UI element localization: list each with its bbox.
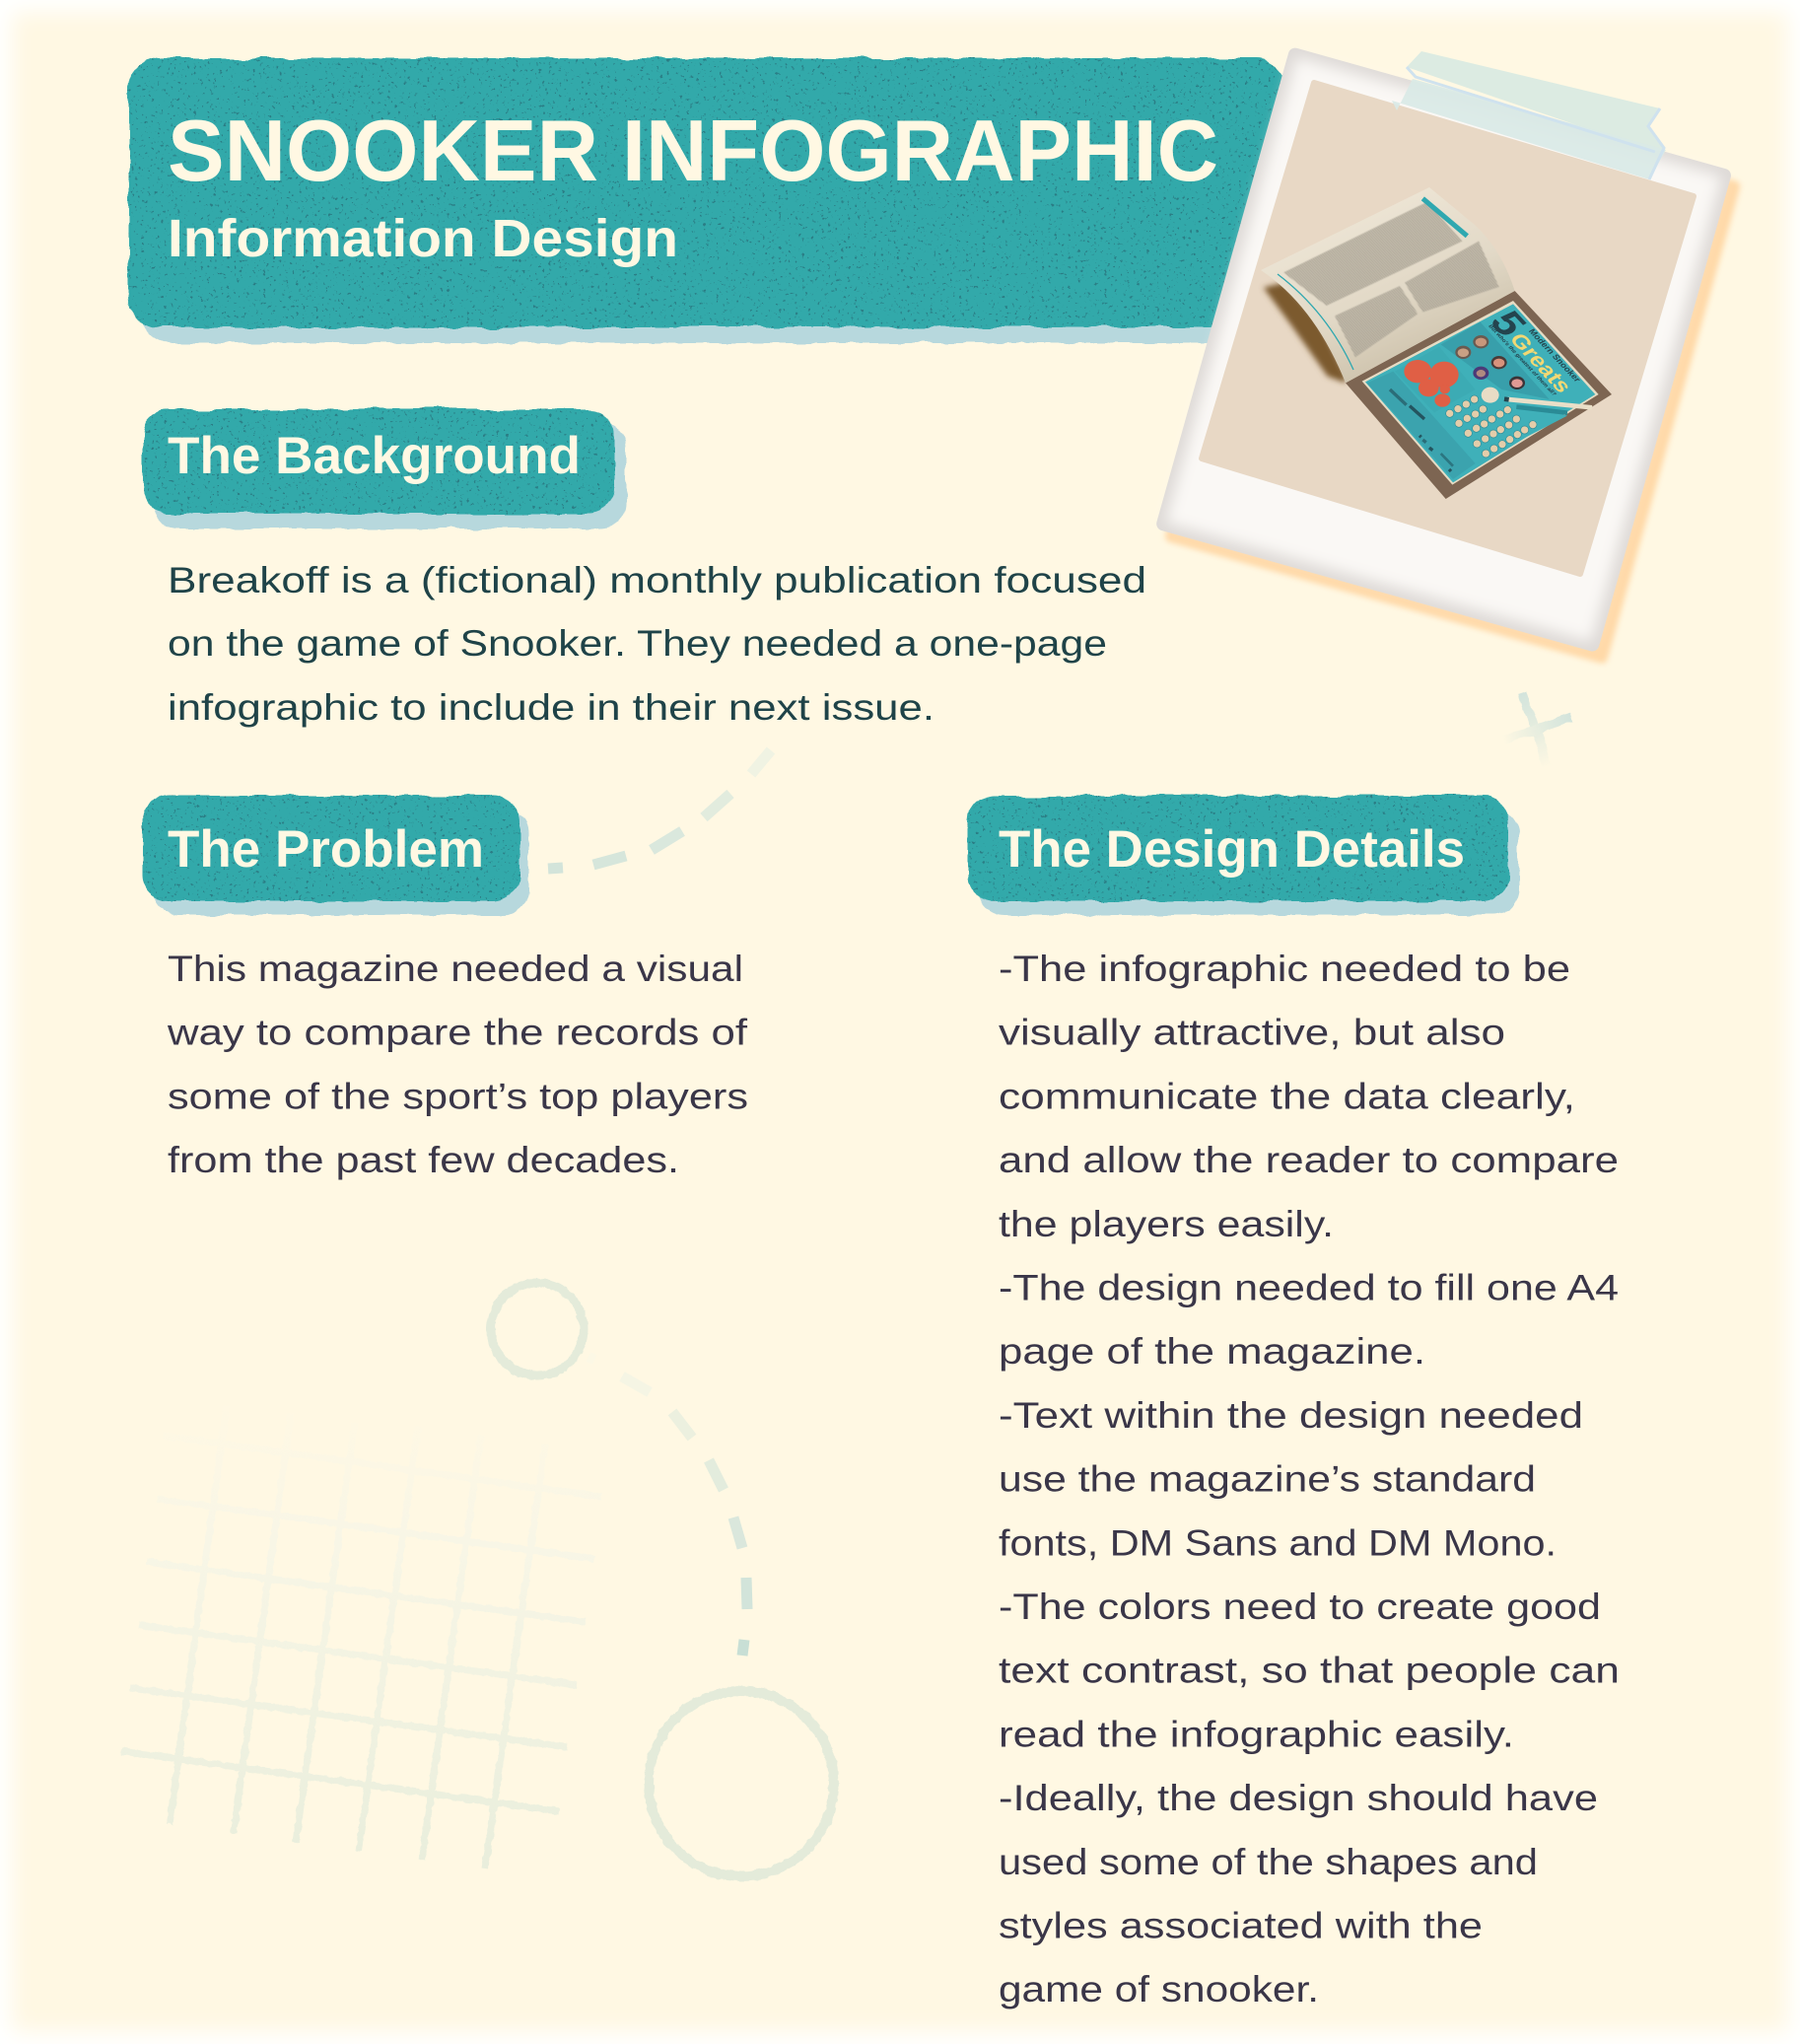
magazine title text: Modern Snooker <box>1527 327 1583 384</box>
text: problem body: This magazine needed a visual <box>168 949 743 989</box>
text: design details body: and allow the reader to compare <box>999 1140 1619 1180</box>
magazine title text: Greats <box>1504 329 1577 396</box>
text: design details body: page of the magazine. <box>999 1331 1425 1372</box>
text: design details body: used some of the shapes and <box>999 1842 1538 1882</box>
magazine mockup <box>1261 187 1612 499</box>
text: design details body: -The design needed to fill one A4 <box>999 1268 1619 1307</box>
heading: The Problem <box>143 796 527 915</box>
section: The Design Details <box>968 796 1620 2009</box>
magazine title text: 5 <box>1481 304 1537 342</box>
text: design details body: use the magazine’s standard <box>999 1459 1536 1500</box>
text: design details body: visually attractive, but also <box>999 1013 1505 1053</box>
small bars <box>1390 389 1453 471</box>
text: design details body: read the infographic easily. <box>999 1714 1514 1754</box>
text: background body: on the game of Snooker. They needed a one-page <box>168 623 1107 664</box>
decorative X mark <box>1503 693 1572 767</box>
text: design details body: the players easily. <box>999 1204 1334 1244</box>
page text columns <box>1283 202 1499 357</box>
decorative dashed line: upper arc <box>548 750 771 869</box>
text: design details body: fonts, DM Sans and DM Mono. <box>999 1522 1557 1563</box>
thumbs grid <box>1446 395 1537 458</box>
text: design details body: styles associated with the <box>999 1905 1483 1946</box>
text: design details body: -Ideally, the design should have <box>999 1778 1598 1818</box>
heading: The Problem: The Problem <box>168 820 484 879</box>
section: The Background <box>143 409 1146 728</box>
red circles <box>1404 360 1459 407</box>
page accents <box>1278 274 1353 370</box>
cue ball and cue <box>1482 388 1592 413</box>
text: problem body <box>167 949 748 1180</box>
title banner <box>129 58 1284 343</box>
text: design details body: -The infographic needed to be <box>999 949 1570 989</box>
washi tape <box>1392 51 1666 179</box>
lower page <box>1346 291 1612 499</box>
decorative grid <box>121 1405 601 1868</box>
photo shadow <box>1164 58 1742 665</box>
text: design details body: -Text within the design needed <box>999 1395 1583 1436</box>
heading: The Background: The Background <box>168 427 581 485</box>
upper page <box>1261 187 1515 383</box>
text: problem body: way to compare the records of <box>167 1013 748 1053</box>
text: design details body: communicate the data clearly, <box>999 1076 1575 1116</box>
polaroid photo of the magazine <box>1155 46 1742 665</box>
decorative small circle <box>491 1283 584 1375</box>
decorative large circle <box>649 1691 834 1876</box>
section: The Problem <box>143 796 748 1180</box>
text: problem body: some of the sport’s top players <box>168 1076 748 1116</box>
text: background body: Breakoff is a (fictional) monthly publication focused <box>168 560 1146 600</box>
text: design details body: text contrast, so that people can <box>999 1651 1620 1691</box>
title: SNOOKER INFOGRAPHIC <box>168 102 1218 199</box>
text: design details body: -The colors need to create good <box>999 1586 1601 1627</box>
magazine title text: But who’s the greatest of them all? <box>1487 324 1558 397</box>
text: background body: infographic to include in their next issue. <box>168 687 935 728</box>
subtitle: Information Design <box>168 209 678 268</box>
text: background body <box>168 560 1146 728</box>
text: design details body: game of snooker. <box>999 1969 1319 2009</box>
magazine title text <box>1481 304 1590 399</box>
heading: The Background <box>143 409 626 529</box>
polaroid frame <box>1155 46 1733 653</box>
player portraits <box>1455 335 1525 389</box>
decorative dashed line: lower arc <box>588 1357 747 1656</box>
photo background <box>1202 83 1694 574</box>
heading: The Design Details: The Design Details <box>999 820 1465 879</box>
text: design details body <box>999 949 1620 2009</box>
text: problem body: from the past few decades. <box>168 1140 679 1180</box>
heading: The Design Details <box>968 796 1518 915</box>
